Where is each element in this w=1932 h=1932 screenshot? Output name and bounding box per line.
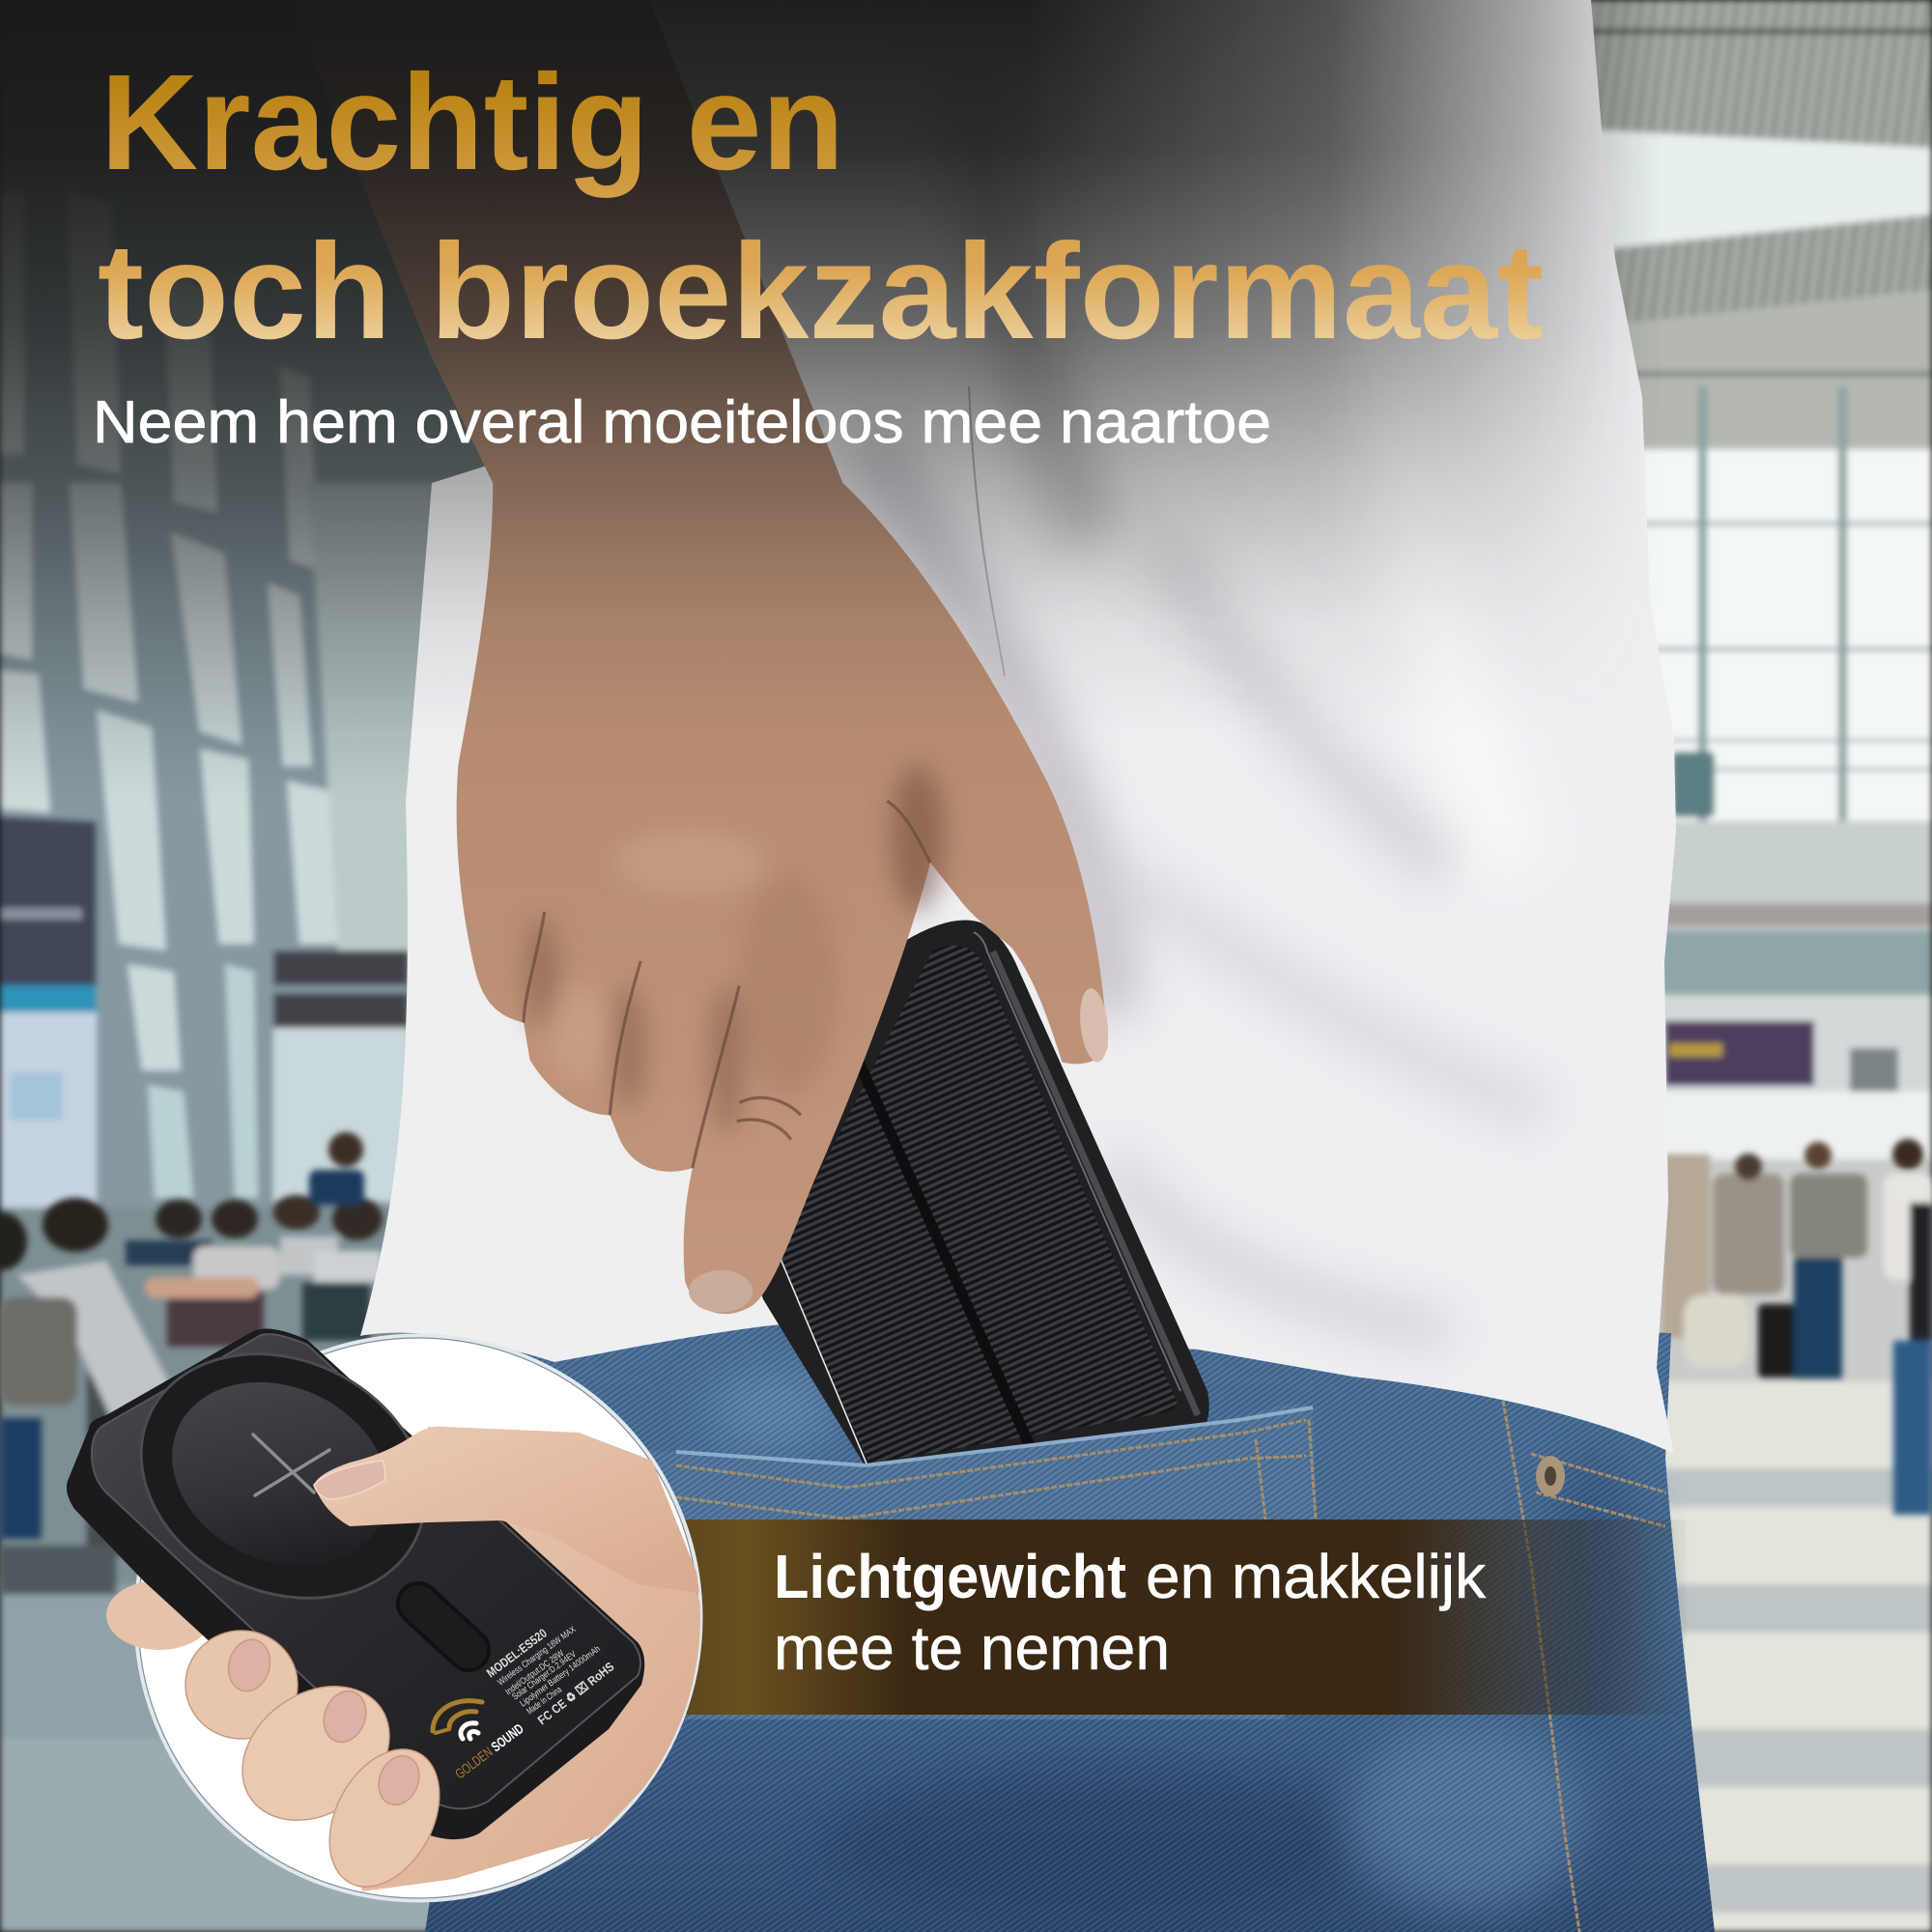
thumbnail: [314, 1461, 385, 1499]
device spec label text: Indel/Output:DC 28W: [503, 1648, 566, 1697]
top dark gradient overlay: [0, 0, 1646, 688]
caption text: mee te nemen: [774, 1613, 1170, 1683]
caption banner: [676, 1520, 1686, 1715]
wireless charging pad: [142, 1348, 418, 1601]
white t-shirt: [360, 0, 1676, 1454]
subtitle: Neem hem overal moeiteloos mee naartoe: [93, 389, 1271, 456]
left side background darkening: [0, 0, 676, 802]
title: toch broekzakformaat: [98, 214, 1544, 367]
seated travellers in the background: [0, 1132, 383, 1594]
jeans: [425, 1294, 1715, 1932]
fingers gripping device: [185, 1631, 462, 1906]
charging cross mark: [253, 1435, 329, 1495]
hand and forearm reaching into pocket: [290, 0, 1112, 1314]
inset circle: hand holding power bank: [67, 1309, 705, 1906]
title: Krachtig en: [100, 45, 844, 198]
lower finger behind device: [106, 1580, 213, 1650]
thumb on pad: [314, 1427, 705, 1594]
device spec label text: Wireless Charging 18W MAX: [496, 1624, 579, 1688]
photo background: airport terminal, right side: [1546, 0, 1932, 1932]
caption text: en makkelijk: [1146, 1542, 1487, 1611]
device spec label text: Solar Charger:D.2.94EV: [510, 1649, 579, 1702]
pill button: [418, 1604, 469, 1650]
photo background: airport terminal, left side: [0, 0, 966, 1932]
caption text: [774, 1542, 1487, 1683]
title: [98, 45, 1544, 367]
wireless charging ring: [101, 1309, 465, 1643]
device spec label text: MODEL:ES520: [484, 1626, 550, 1680]
device spec label text: Made In China: [525, 1685, 564, 1717]
jeans pocket, stitching and rivet: [618, 1401, 1666, 1932]
device spec label text: [484, 1624, 617, 1727]
walking travellers in the background: [1662, 1139, 1932, 1515]
caption text: Lichtgewicht: [774, 1542, 1126, 1611]
device spec label text: FC CE ♻ ⌧ RoHS: [535, 1659, 617, 1727]
palm behind device: [337, 1427, 705, 1891]
power bank solar panel in pocket: [761, 920, 1209, 1468]
brand logo: [433, 1701, 482, 1739]
brand wordmark: GOLDEN SOUND: [453, 1721, 526, 1782]
device body: [67, 1309, 644, 1839]
device spec label text: Lipolymer Battery 14000mAh: [518, 1644, 603, 1709]
